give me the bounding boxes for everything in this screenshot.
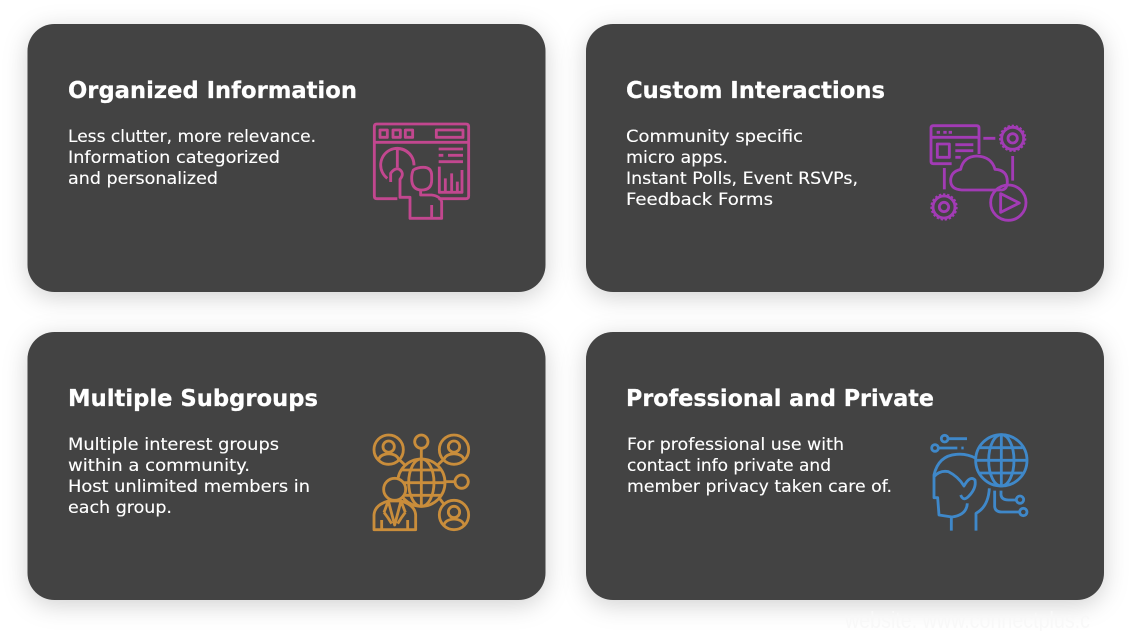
icon: dashboard presenter <box>374 124 469 218</box>
text block: custom interactions: micro apps. <box>626 147 728 167</box>
text block: professional and private: For professional use with <box>627 434 844 454</box>
heading: multiple subgroups: Multiple Subgroups <box>68 384 318 412</box>
text block: professional and private <box>627 434 892 496</box>
text block: custom interactions <box>626 126 858 209</box>
text block: custom interactions: Community specific <box>626 126 803 146</box>
text block: multiple subgroups: Multiple interest groups <box>68 434 279 454</box>
panel: organized information <box>28 24 546 292</box>
icon: cloud apps <box>931 126 1026 220</box>
text block: organized information <box>68 126 316 188</box>
text block: organized information: Less clutter, more relevance. <box>68 126 316 146</box>
panel: professional and private <box>586 332 1104 600</box>
icon: head and globe <box>932 435 1027 531</box>
text block: multiple subgroups <box>68 434 310 517</box>
text block: custom interactions: Feedback Forms <box>626 189 773 209</box>
text block: professional and private: contact info private and <box>627 455 831 475</box>
text block: multiple subgroups: Host unlimited members in <box>68 476 310 496</box>
text block: multiple subgroups: within a community. <box>68 455 250 475</box>
heading: custom interactions: Custom Interactions <box>626 76 885 104</box>
text block: multiple subgroups: each group. <box>68 497 172 517</box>
panel: custom interactions <box>586 24 1104 292</box>
icon: global network <box>374 435 469 530</box>
text block: organized information: and personalized <box>68 168 218 188</box>
text block: professional and private: member privacy taken care of. <box>627 476 892 496</box>
text block: organized information: Information categorized <box>68 147 280 167</box>
heading: organized information: Organized Information <box>68 76 357 104</box>
text block: custom interactions: Instant Polls, Event RSVPs, <box>626 168 858 188</box>
heading: professional and private: Professional and Private <box>626 384 934 412</box>
panel: multiple subgroups <box>28 332 546 600</box>
